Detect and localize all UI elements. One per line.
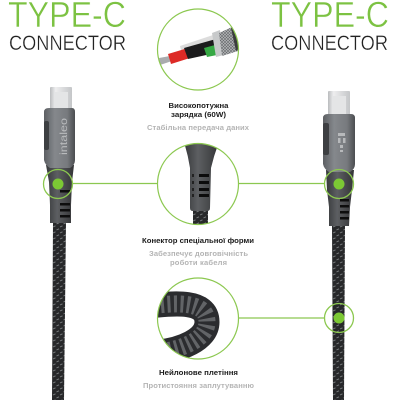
text: special connector: Конектор спеціальної форми: [142, 236, 254, 245]
text: high-power charging: [147, 101, 250, 132]
left cable with intaleo connector: [44, 87, 75, 400]
connector line: top row left: [72, 182, 158, 184]
text: high-power charging: зарядка (60W): [171, 110, 226, 119]
text: high-power charging: Стабільна передача даних: [147, 123, 250, 132]
connector line: bottom row: [239, 317, 325, 319]
left cable with intaleo connector: intaleo: [58, 118, 70, 155]
heading: left TYPE-C CONNECTOR: [8, 0, 126, 55]
panel: special-shape connector: [158, 142, 238, 226]
text: nylon braid: Нейлонове плетіння: [159, 368, 238, 377]
text: special connector: Забезпечує довговічність: [149, 249, 248, 258]
connector line: top row right: [239, 182, 325, 184]
text: special connector: [142, 236, 254, 267]
heading: left TYPE-C CONNECTOR: CONNECTOR: [9, 31, 126, 55]
text: nylon braid: Протистояння заплутуванню: [143, 381, 254, 390]
heading: right TYPE-C CONNECTOR: [271, 0, 389, 55]
marker: right cable braid: [324, 304, 354, 332]
marker: right connector: [324, 170, 354, 198]
marker: left connector: [44, 170, 72, 198]
panel: charging cable cross-section: [158, 9, 240, 90]
right cable with logo connector: [323, 91, 355, 400]
text: nylon braid: [143, 368, 254, 390]
text: special connector: роботи кабеля: [170, 258, 227, 267]
panel: nylon braid coil: [148, 278, 238, 359]
text: high-power charging: Високопотужна: [168, 101, 229, 110]
